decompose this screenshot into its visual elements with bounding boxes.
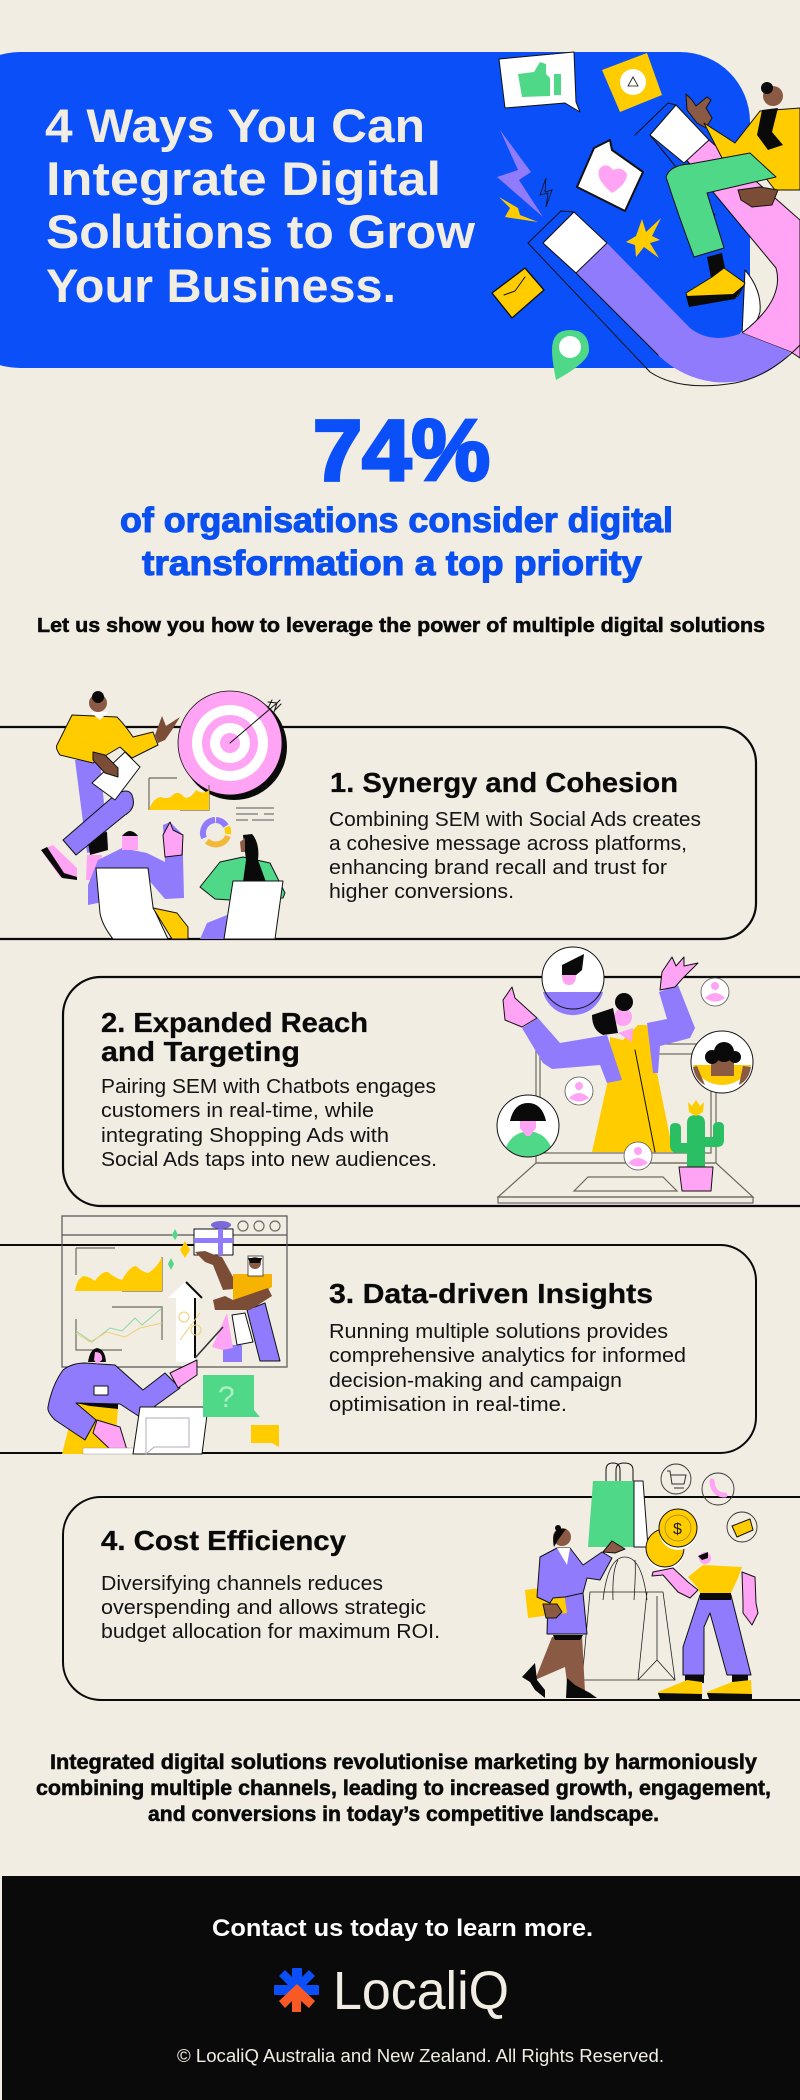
- footer panel: [2, 1876, 800, 2100]
- laptop on desk: [133, 1407, 208, 1454]
- card 1 heading: 1. Synergy and Cohesion: [330, 767, 678, 798]
- contact call to action: Contact us today to learn more.: [212, 1915, 593, 1942]
- card 2 body: Social Ads taps into new audiences.: [101, 1149, 437, 1171]
- coins: $: [673, 1521, 682, 1538]
- LocaliQ wordmark: LocaliQ: [333, 1961, 509, 2021]
- sparkles: [168, 1229, 190, 1270]
- small avatar: [701, 978, 729, 1006]
- icon: phone: [702, 1473, 734, 1505]
- hero banner: [0, 52, 750, 368]
- standing man: [41, 691, 180, 880]
- panel: card 2 expanded reach and targeting: [63, 947, 800, 1206]
- cactus in pot: [670, 1100, 724, 1191]
- card 2 outline: [63, 977, 800, 1206]
- businesswoman: [522, 1525, 625, 1698]
- icon: yellow star burst: [626, 218, 661, 258]
- avatar circle: purple: [542, 947, 604, 1015]
- hero title: Solutions to Grow: [46, 205, 475, 258]
- hero section: [0, 52, 800, 386]
- green question speech bubble: [203, 1375, 260, 1417]
- card 3 outline: [0, 1245, 756, 1453]
- card 2 heading: and Targeting: [101, 1036, 300, 1067]
- target: [178, 691, 287, 800]
- man sitting on magnet: [666, 82, 800, 307]
- browser window: [62, 1216, 287, 1367]
- closing statement: combining multiple channels, leading to increased growth, engagement,: [36, 1777, 771, 1800]
- statistic caption: [120, 501, 673, 583]
- seated person in purple: [88, 822, 188, 939]
- card 4 outline: [63, 1497, 800, 1700]
- card 1 outline: [0, 727, 756, 939]
- laptop: [498, 1044, 753, 1203]
- card 2 body: customers in real-time, while: [101, 1100, 374, 1122]
- statistic 74%: 74%: [313, 403, 490, 499]
- card 3 body: optimisation in real-time.: [329, 1394, 567, 1416]
- card 1 body: a cohesive message across platforms,: [329, 833, 687, 855]
- small avatar: [565, 1077, 593, 1105]
- card 2 heading: [101, 1007, 368, 1067]
- icon: purple lightning: [497, 130, 543, 217]
- card 3 body: [329, 1321, 686, 1416]
- icon: envelope: [727, 1512, 757, 1542]
- closing statement: and conversions in today’s competitive landscape.: [148, 1803, 659, 1826]
- woman: [503, 957, 698, 1152]
- area chart: [149, 778, 209, 810]
- card 4 body: budget allocation for maximum ROI.: [101, 1621, 440, 1643]
- illustration: target and team: [41, 691, 287, 939]
- growth arrow: [168, 1282, 202, 1362]
- card 2 heading: 2. Expanded Reach: [101, 1007, 368, 1038]
- illustration: woman in laptop with avatars: [497, 947, 753, 1203]
- panel: card 1 synergy and cohesion: [0, 691, 756, 939]
- card 3 body: decision-making and campaign: [329, 1370, 622, 1392]
- card 2 body: [101, 1076, 437, 1171]
- closing statement: [36, 1751, 771, 1826]
- hero title: 4 Ways You Can: [45, 99, 425, 152]
- card 2 body: integrating Shopping Ads with: [101, 1125, 389, 1147]
- icon: envelope: [492, 268, 544, 318]
- panel: card 3 data-driven insights: [0, 1216, 756, 1454]
- hero title: [45, 99, 475, 312]
- card 4 body: Diversifying channels reduces: [101, 1573, 383, 1595]
- card 1 body: higher conversions.: [329, 881, 514, 903]
- card 1 body: Combining SEM with Social Ads creates: [329, 809, 701, 831]
- panel: card 4 cost efficiency: [63, 1463, 800, 1700]
- hero title: Integrate Digital: [46, 152, 441, 205]
- card 4 body: [101, 1573, 440, 1643]
- icon: location pin: [552, 330, 589, 380]
- donut chart: [203, 820, 228, 844]
- magnet illustration: [528, 103, 800, 386]
- gift box: [194, 1221, 233, 1255]
- copyright notice: © LocaliQ Australia and New Zealand. All Rights Reserved.: [177, 2045, 664, 2066]
- white shopping bag: [582, 1557, 675, 1680]
- area chart: [75, 1248, 162, 1291]
- card 4 heading: 4. Cost Efficiency: [101, 1525, 346, 1556]
- hero title: Your Business.: [46, 259, 396, 312]
- illustration: dashboard and presenter: [48, 1216, 287, 1454]
- card 2 body: Pairing SEM with Chatbots engages: [101, 1076, 436, 1098]
- footer background: [2, 1876, 800, 2100]
- icon: outline lightning: [540, 178, 552, 207]
- avatar circle: green: [497, 1095, 559, 1157]
- card 3 body: comprehensive analytics for informed: [329, 1345, 686, 1367]
- shopper: [195, 1251, 280, 1362]
- illustration: shoppers: [522, 1463, 758, 1699]
- yellow speech bubble: [251, 1425, 279, 1447]
- green question speech bubble: ?: [218, 1381, 235, 1414]
- man with coins: [652, 1552, 758, 1699]
- icon: LocaliQ logo mark: [274, 1968, 319, 2012]
- statistic caption: of organisations consider digital: [120, 501, 673, 540]
- icon: heart card: [577, 140, 643, 211]
- card 4 body: overspending and allows strategic: [101, 1597, 426, 1619]
- closing statement: Integrated digital solutions revolutionise marketing by harmoniously: [50, 1751, 757, 1774]
- coins: [646, 1509, 697, 1570]
- small avatar: [624, 1142, 652, 1170]
- text lines: [236, 808, 274, 820]
- card 3 heading: 3. Data-driven Insights: [329, 1278, 653, 1309]
- icon: yellow diamond badge: [602, 53, 662, 112]
- line chart: [76, 1307, 162, 1350]
- icon: thumbs up card: [499, 52, 580, 112]
- intro sentence: Let us show you how to leverage the power of multiple digital solutions: [37, 615, 765, 637]
- card 1 body: [329, 809, 701, 903]
- card 1 body: enhancing brand recall and trust for: [329, 857, 667, 879]
- icon: shopping cart: [661, 1464, 691, 1494]
- avatar circle: yellow: [691, 1031, 753, 1093]
- presenter woman: [48, 1327, 223, 1454]
- icon: yellow lightning: [499, 197, 538, 222]
- seated person in green: [200, 834, 285, 939]
- card 3 body: Running multiple solutions provides: [329, 1321, 668, 1343]
- green shopping bag: [588, 1463, 648, 1547]
- statistic caption: transformation a top priority: [142, 544, 643, 583]
